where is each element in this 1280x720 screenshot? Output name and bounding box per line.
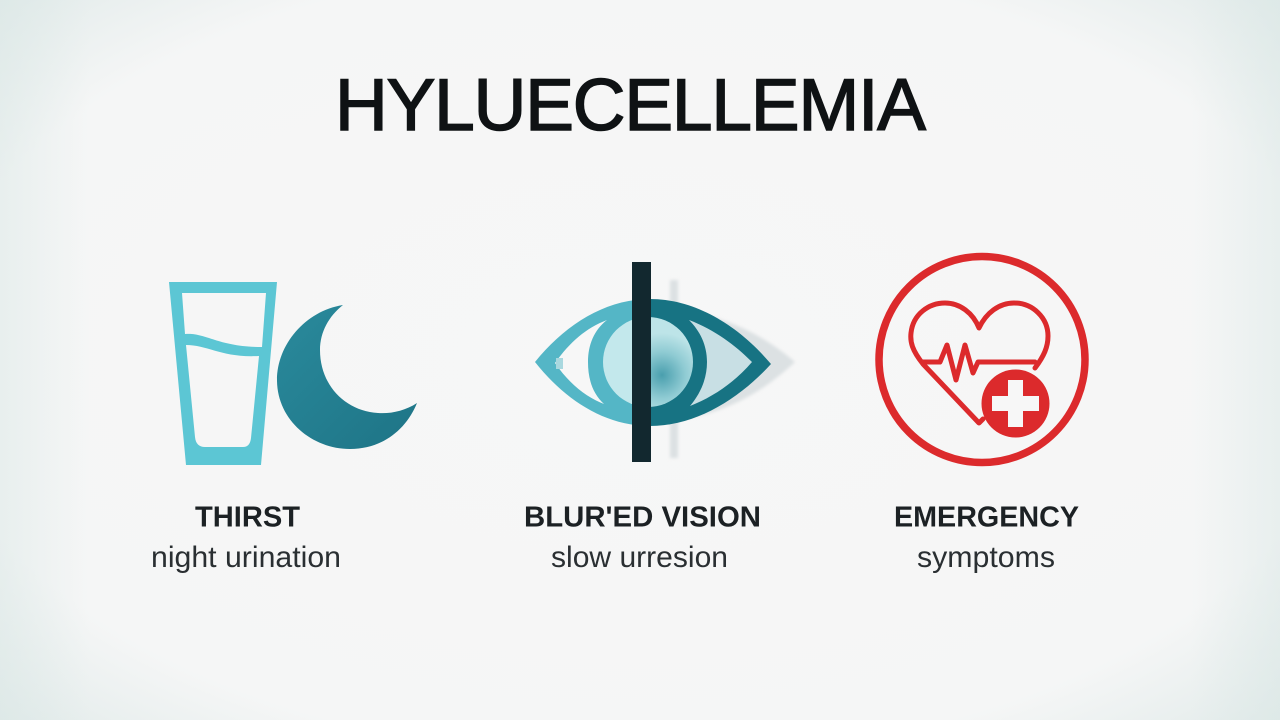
panel: thirst bbox=[151, 282, 417, 574]
icon: water glass bbox=[169, 282, 277, 465]
text: night urination: night urination bbox=[151, 541, 341, 574]
icon: medical cross badge bbox=[982, 370, 1050, 438]
icon: eye left half bbox=[535, 300, 632, 424]
icon: red ring bbox=[879, 256, 1085, 462]
label: emergency: EMERGENCY bbox=[894, 502, 1079, 534]
title: HYLUECELLEMIA bbox=[335, 65, 926, 146]
label: thirst: THIRST bbox=[195, 502, 300, 534]
label: blured vision: BLUR'ED VISION bbox=[524, 502, 761, 534]
icon: heart with pulse bbox=[911, 303, 1048, 423]
icon: vertical bar bbox=[632, 262, 651, 462]
icon: eye right half bbox=[651, 299, 771, 426]
icon: ghost eye blur bbox=[660, 280, 795, 458]
panel: blurred vision bbox=[524, 262, 795, 574]
text: slow urresion: slow urresion bbox=[551, 541, 728, 574]
icon: crescent moon bbox=[277, 305, 417, 449]
text: symptoms: symptoms bbox=[917, 541, 1055, 574]
panel: emergency bbox=[879, 256, 1085, 574]
